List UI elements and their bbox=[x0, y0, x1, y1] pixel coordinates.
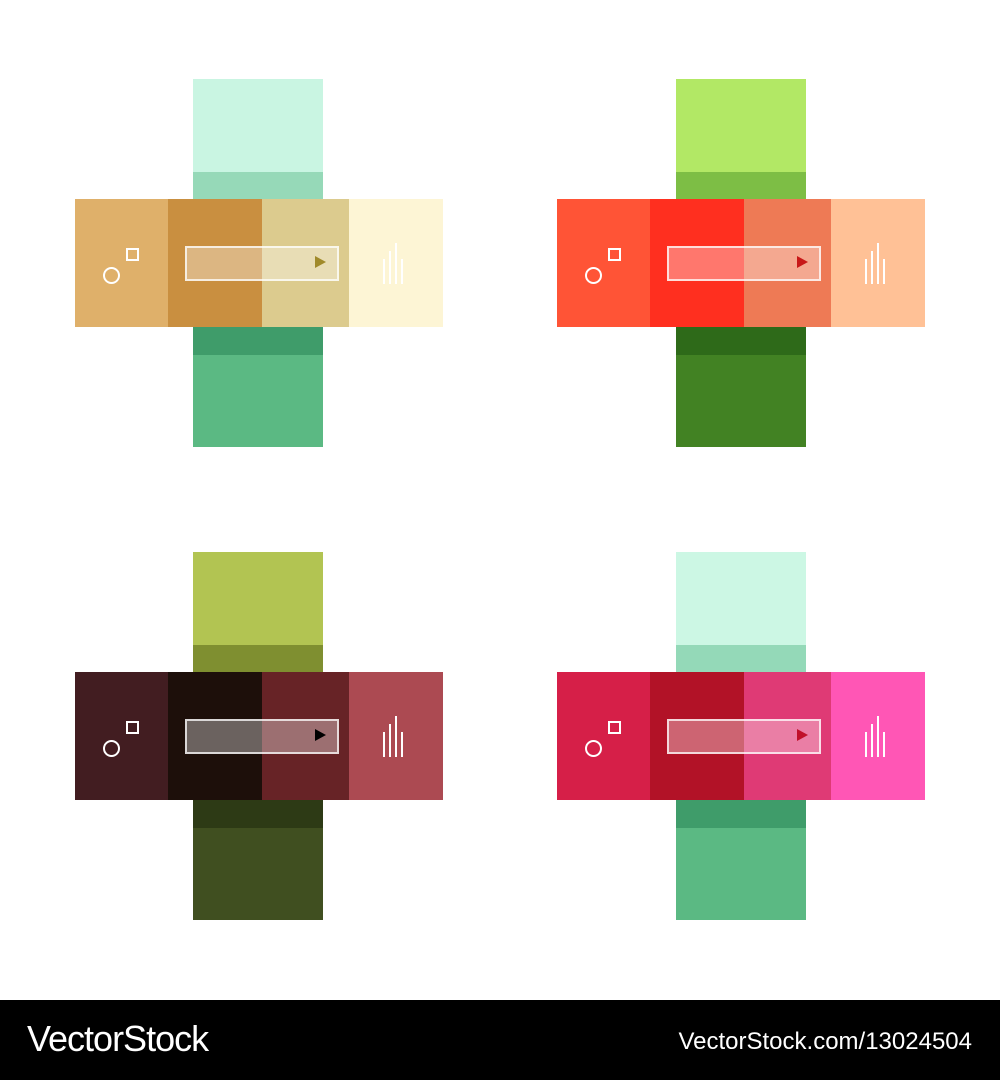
cross 2: red bbox=[557, 79, 925, 447]
cross 1: amber bbox=[75, 79, 443, 447]
footer url: VectorStock.com/13024504 bbox=[678, 1028, 972, 1055]
icons bbox=[103, 267, 120, 284]
footer bbox=[0, 1000, 1000, 1080]
footer brand: VectorStock bbox=[27, 1018, 208, 1059]
cross 3: dark bbox=[75, 552, 443, 920]
icons bbox=[103, 740, 120, 757]
icons bbox=[585, 267, 602, 284]
icons bbox=[585, 740, 602, 757]
cross 4: pink bbox=[557, 552, 925, 920]
